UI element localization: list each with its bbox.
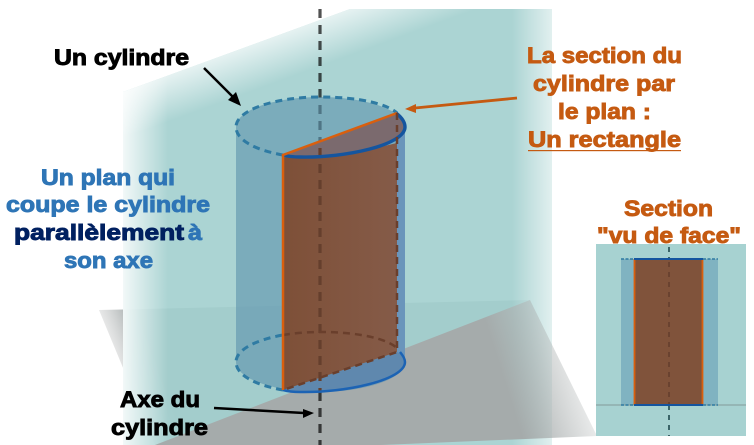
right side sliver: [397, 122, 405, 362]
label: Un cylindre: Un cylindre: [54, 45, 189, 70]
ground line: [596, 404, 746, 406]
top segment: [283, 113, 405, 157]
label: section: le plan :: [558, 99, 651, 124]
arrow: to section: [405, 98, 517, 113]
solid arc top: [283, 113, 405, 157]
bottom segment: [283, 352, 405, 392]
axis through section: [668, 262, 670, 405]
blue top and bottom edges: [634, 259, 703, 405]
label: plane: son axe: [64, 248, 153, 273]
dashed ellipse bottom, left part: [236, 335, 283, 390]
label: axis: [111, 387, 208, 440]
horizontal plane, front part: [155, 300, 597, 445]
section rectangle: [283, 143, 397, 390]
label: section: La section du: [527, 43, 682, 68]
orange edges: [634, 259, 702, 405]
label: section: [527, 43, 682, 152]
arrow: to axis: [214, 408, 314, 418]
section hidden edges: [283, 113, 397, 390]
label: axis: Axe du: [120, 387, 200, 412]
dashed rim ends: [621, 259, 718, 405]
panel: front view: [596, 244, 746, 436]
section orange edges: [283, 113, 397, 390]
label: plane: à: [188, 220, 203, 245]
label: plane: parallèlement: [14, 220, 185, 245]
label: plane: [6, 165, 210, 273]
label: axis: cylindre: [111, 415, 208, 440]
section front view: [634, 259, 703, 405]
label: plane: Un plan qui: [41, 165, 175, 190]
dashed ellipse bottom, behind section: [283, 332, 397, 348]
label: section: cylindre par: [533, 71, 675, 96]
solid arc bottom: [283, 352, 405, 392]
vertical cutting plane: [123, 9, 552, 445]
heading: front view: Section: [624, 196, 713, 221]
horizontal plane, back part: [99, 300, 530, 445]
cylinder: [236, 97, 405, 392]
cylinder axis, upper and lower parts: [318, 9, 322, 445]
dashed ellipse top: [236, 97, 397, 155]
label: section: Un rectangle: [528, 127, 681, 152]
axis seen through section: [318, 148, 322, 392]
arrow: to cylinder: [204, 68, 241, 106]
label: plane: coupe le cylindre: [6, 192, 210, 217]
cylinder body as a single silhouette: [236, 97, 405, 392]
axis front view, outside: [668, 247, 670, 436]
panel background: [596, 244, 746, 436]
heading: front view: [597, 196, 741, 248]
cylinder front view: [621, 259, 718, 405]
heading: front view: "vu de face": [597, 223, 741, 248]
